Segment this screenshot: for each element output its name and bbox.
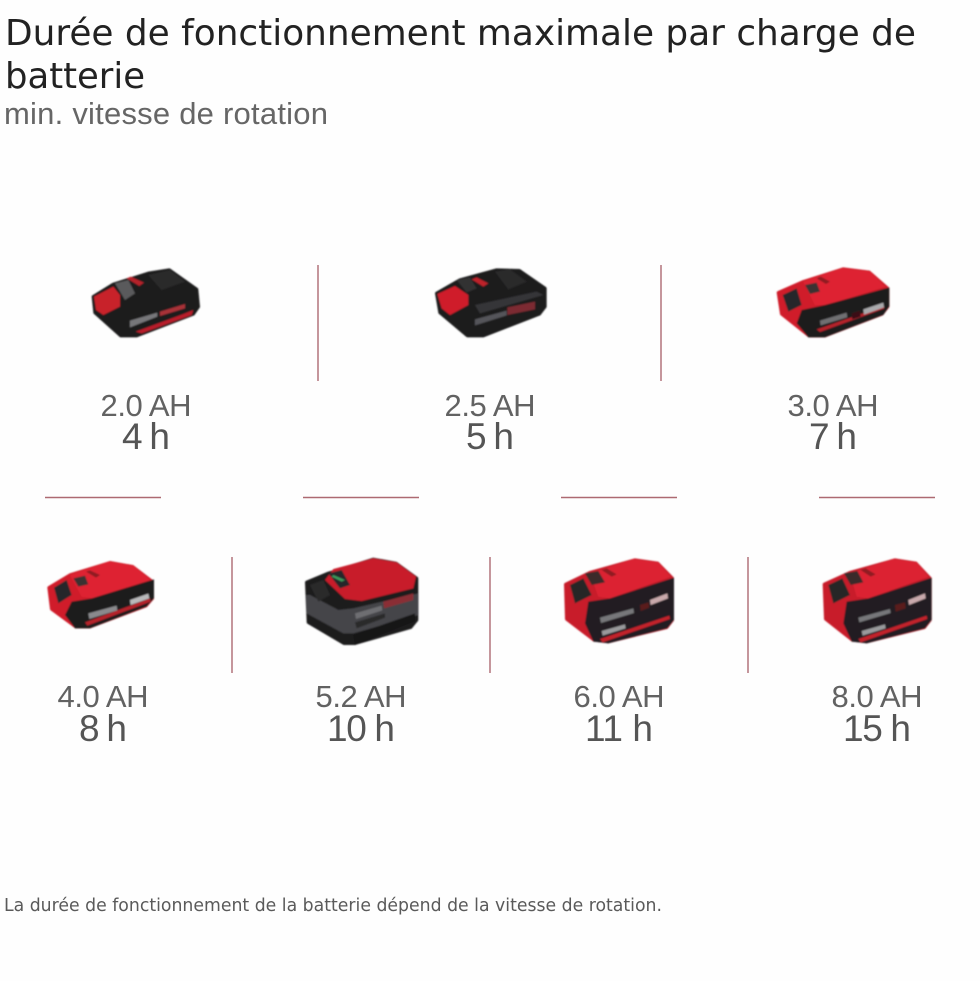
subtitle: min. vitesse de rotation xyxy=(4,96,328,131)
footnote: La durée de fonctionnement de la batterie dépend de la vitesse de rotation. xyxy=(4,896,662,916)
panel: 2.5 AH battery xyxy=(437,269,545,457)
panel: 4.0 AH battery xyxy=(49,562,154,749)
label: 3.0 AH xyxy=(788,388,878,423)
panel: 2.0 AH battery xyxy=(93,270,198,457)
label xyxy=(316,679,406,749)
icon: 2.5 AH battery xyxy=(437,269,545,336)
label: 2.0 AH xyxy=(100,388,192,423)
icon: 6.0 AH battery xyxy=(566,559,674,643)
label: 4.0 AH xyxy=(58,679,148,714)
label xyxy=(832,679,922,749)
panel: 8.0 AH battery xyxy=(824,559,932,749)
label: 2.5 AH xyxy=(444,388,536,423)
panel: 3.0 AH battery xyxy=(778,268,889,457)
label xyxy=(100,388,192,457)
label: 4 h xyxy=(122,416,170,457)
label: 11 h xyxy=(585,708,653,749)
label xyxy=(788,388,878,457)
title xyxy=(5,13,916,97)
icon: 8.0 AH battery xyxy=(824,559,932,643)
label: 15 h xyxy=(843,708,911,749)
panel: 5.2 AH battery xyxy=(306,558,418,749)
title: batterie xyxy=(5,56,145,97)
label: 5.2 AH xyxy=(316,679,406,714)
label: 7 h xyxy=(809,416,857,457)
icon: 4.0 AH battery xyxy=(49,562,154,628)
label xyxy=(574,679,664,749)
icon: 3.0 AH battery xyxy=(778,268,889,337)
label: 10 h xyxy=(327,708,395,749)
title: Durée de fonctionnement maximale par charge de xyxy=(5,13,916,54)
label: 8 h xyxy=(79,708,127,749)
panel: 6.0 AH battery xyxy=(566,559,674,749)
label: 6.0 AH xyxy=(574,679,664,714)
label xyxy=(58,679,148,749)
icon: 2.0 AH battery xyxy=(93,270,198,336)
label xyxy=(444,388,536,457)
label: 5 h xyxy=(466,416,514,457)
label: 8.0 AH xyxy=(832,679,922,714)
icon: 5.2 AH battery xyxy=(306,558,418,645)
